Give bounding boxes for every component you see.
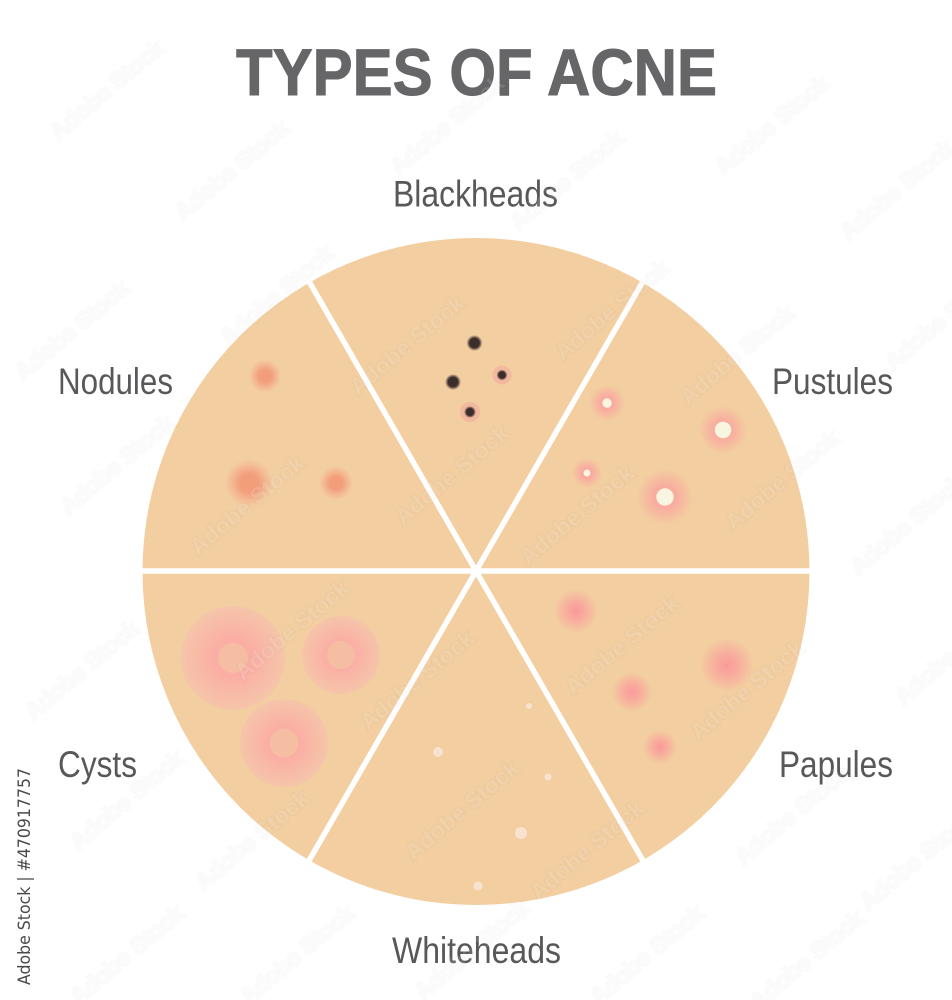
watermark: Adobe Stock <box>345 289 469 400</box>
wheel of skin segments <box>130 238 822 905</box>
watermark: Adobe Stock <box>215 239 339 350</box>
label: Blackheads: Blackheads <box>393 174 558 214</box>
watermark: Adobe Stock <box>230 574 354 685</box>
watermark: Adobe Stock <box>355 624 479 735</box>
watermark: Adobe Stock <box>560 589 684 700</box>
watermark: Adobe Stock <box>400 754 524 865</box>
watermark: Adobe Stock <box>675 299 799 410</box>
watermark: Adobe Stock <box>170 114 294 225</box>
title: TYPES OF ACNE <box>236 35 717 109</box>
watermark: Adobe Stock <box>65 744 189 855</box>
label: Nodules: Nodules <box>58 361 173 402</box>
label: Cysts: Cysts <box>58 744 137 785</box>
watermark: Adobe Stock <box>730 759 854 870</box>
watermark: Adobe Stock <box>390 419 514 530</box>
panel: pustules spots <box>572 385 747 525</box>
watermark: Adobe Stock <box>190 784 314 895</box>
watermark: Adobe Stock <box>720 424 844 535</box>
watermark: Adobe Stock <box>505 124 629 235</box>
panel: whiteheads spots <box>433 703 552 890</box>
watermark: Adobe Stock <box>55 409 179 520</box>
watermark: Adobe Stock <box>20 614 144 725</box>
stock image id: Adobe Stock | #470917757 <box>15 768 35 985</box>
watermark: Adobe Stock <box>685 634 809 745</box>
panel: cysts spots <box>181 606 380 787</box>
label: Papules: Papules <box>779 744 893 785</box>
watermark: Adobe Stock <box>10 274 134 385</box>
label: Pustules: Pustules <box>772 361 893 402</box>
watermark: Adobe Stock <box>525 794 649 905</box>
watermark: Adobe Stock <box>185 449 309 560</box>
watermark: Adobe Stock <box>710 69 834 180</box>
watermark: Adobe Stock <box>515 459 639 570</box>
watermark: Adobe Stock <box>550 254 674 365</box>
watermark: Adobe Stock <box>385 69 509 180</box>
panel: papules spots <box>554 589 754 764</box>
panel: blackheads spots <box>445 335 512 422</box>
watermark: Adobe Stock <box>45 34 169 145</box>
panel: nodules spots <box>225 360 353 507</box>
label: Whiteheads: Whiteheads <box>392 930 561 971</box>
